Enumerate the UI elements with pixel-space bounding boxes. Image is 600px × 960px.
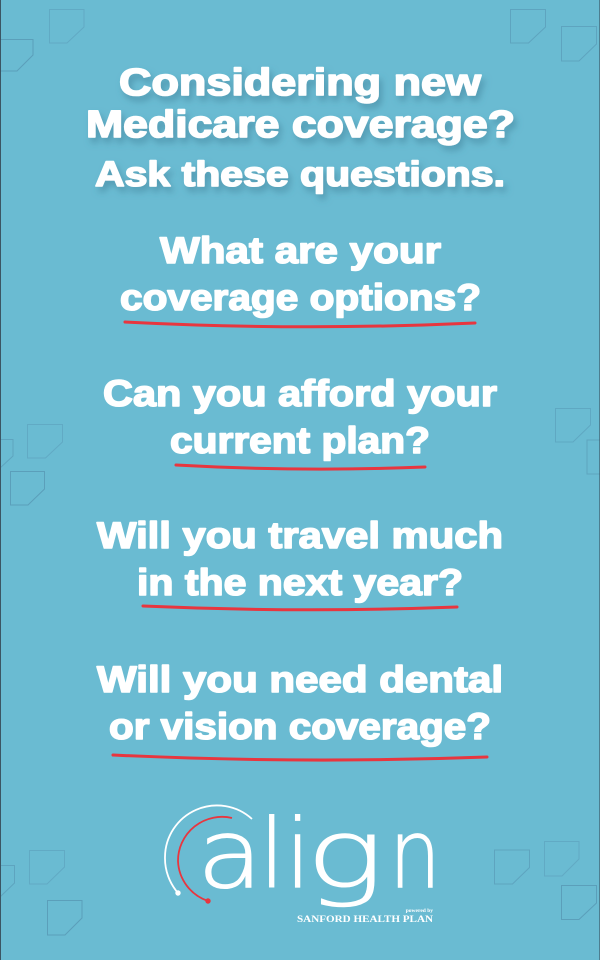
Sanford Health Plan: SANFORD HEALTH PLAN: [297, 915, 433, 925]
powered by line: powered by: [406, 908, 433, 914]
question: dental or vision: or vision coverage?: [109, 706, 491, 747]
question: dental or vision: Will you need dental: [97, 659, 503, 700]
logo: align: [165, 800, 441, 925]
logo wordmark: n: [389, 800, 441, 910]
question: travel: [97, 515, 503, 610]
title: Considering new: [119, 62, 482, 104]
question: afford plan: Can you afford your: [103, 373, 497, 414]
question: coverage options: coverage options?: [120, 277, 481, 318]
logo wordmark: a: [197, 800, 263, 910]
question: travel: Will you travel much: [97, 515, 503, 556]
icon: red arc: [178, 817, 232, 904]
logo wordmark: i: [285, 800, 311, 910]
question: coverage options: What are your: [160, 230, 441, 271]
title: Ask these questions.: [95, 155, 505, 194]
question: afford plan: current plan?: [170, 420, 430, 461]
question: travel: in the next year?: [137, 562, 463, 603]
icon: white arc: [165, 805, 252, 896]
title: Medicare coverage?: [86, 104, 515, 146]
question: dental or vision: [97, 659, 503, 760]
title: [86, 62, 515, 194]
question: coverage options: [120, 230, 481, 327]
logo wordmark: g: [306, 800, 384, 910]
logo wordmark: [197, 800, 441, 910]
logo wordmark: l: [259, 800, 285, 910]
question: afford plan: [103, 373, 497, 469]
